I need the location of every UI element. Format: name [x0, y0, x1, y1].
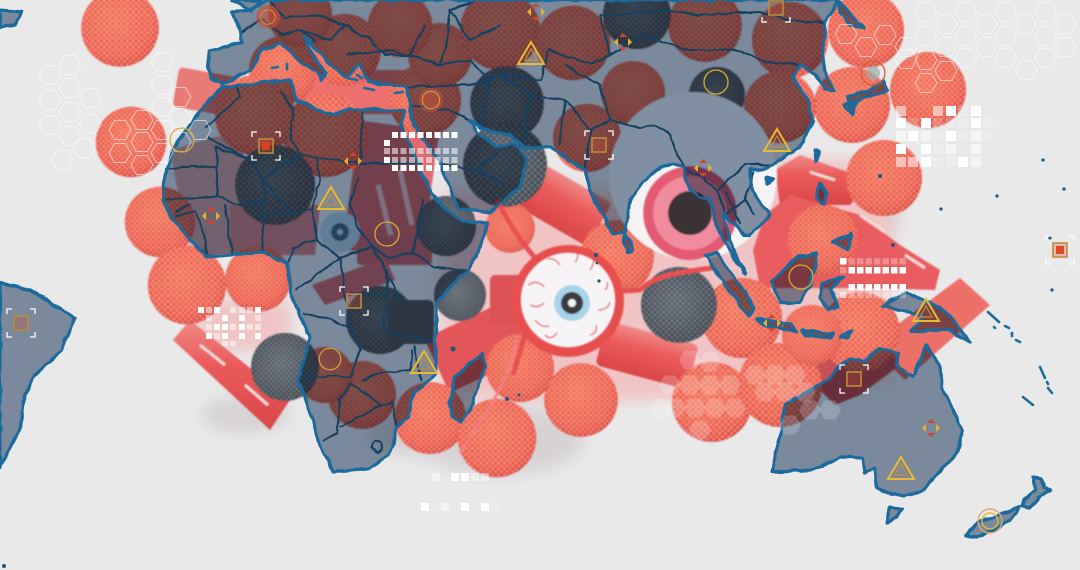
land: Australia [772, 345, 963, 496]
marker: diamond Libya [344, 152, 362, 170]
marker: triangle Papua [913, 299, 939, 321]
black berry candies [235, 0, 745, 401]
marker: ring Borneo [789, 265, 813, 289]
marker: bracket Algeria [252, 132, 280, 160]
licorice sticks [170, 67, 990, 430]
marker: ring Angola [319, 348, 341, 370]
marker: bracket Congo [340, 287, 368, 315]
marker: bracket top right [762, 0, 790, 22]
pixel grid: bottom [421, 473, 499, 511]
marker: ring Iraq [419, 88, 443, 112]
hexagon overlay: upper left [39, 52, 211, 174]
marker: diamond top [527, 3, 545, 21]
pixel grid: Borneo [840, 258, 906, 298]
small eye on left [320, 212, 360, 252]
marker: bracket India [585, 131, 613, 159]
pixel grid: west Africa coast [198, 307, 261, 346]
hexagon overlay: upper right [835, 2, 1076, 92]
bloodshot eyeball with veins [460, 200, 712, 453]
red raspberry candies [81, 0, 966, 477]
soft candy shadow [200, 195, 900, 475]
marker: triangle Australia [888, 457, 914, 479]
pale pink base under central candies [200, 160, 890, 400]
marker: bracket South America [7, 309, 35, 337]
marker: ring Mauritania [170, 128, 194, 152]
marker: ring Sudan [375, 222, 399, 246]
marker: triangle Russia [518, 42, 544, 64]
marker: ring New Zealand [978, 509, 1002, 533]
candy photograph [81, 0, 990, 477]
scattered map dots [2, 158, 1066, 568]
pixel grid: upper right [896, 106, 993, 167]
marker: triangle Tanzania [411, 351, 437, 373]
marker: diamond Java [763, 314, 781, 332]
marker: target France [256, 5, 280, 29]
land: Eurasia [208, 0, 838, 273]
marker: bracket Australia [840, 365, 868, 393]
marker: ring Japan [861, 61, 885, 85]
land: South America [0, 282, 75, 468]
marker: triangle Chad [318, 187, 344, 209]
small Pacific and Mediterranean islands [272, 64, 1052, 405]
land: Africa [163, 80, 488, 472]
marker: diamond Burma [694, 159, 712, 177]
marker: diamond Asia [614, 33, 632, 51]
marker: diamond Mali [202, 207, 220, 225]
pixel grid: Africa top [384, 132, 458, 171]
hexagon overlay: filled lower centre [649, 350, 841, 440]
marker: diamond Australia [922, 419, 940, 437]
marker: ring Mongolia [704, 70, 728, 94]
country borders [165, 0, 825, 452]
large pink eyeball [609, 92, 777, 260]
marker: bracket far right [1046, 236, 1074, 264]
marker: triangle China [764, 129, 790, 151]
